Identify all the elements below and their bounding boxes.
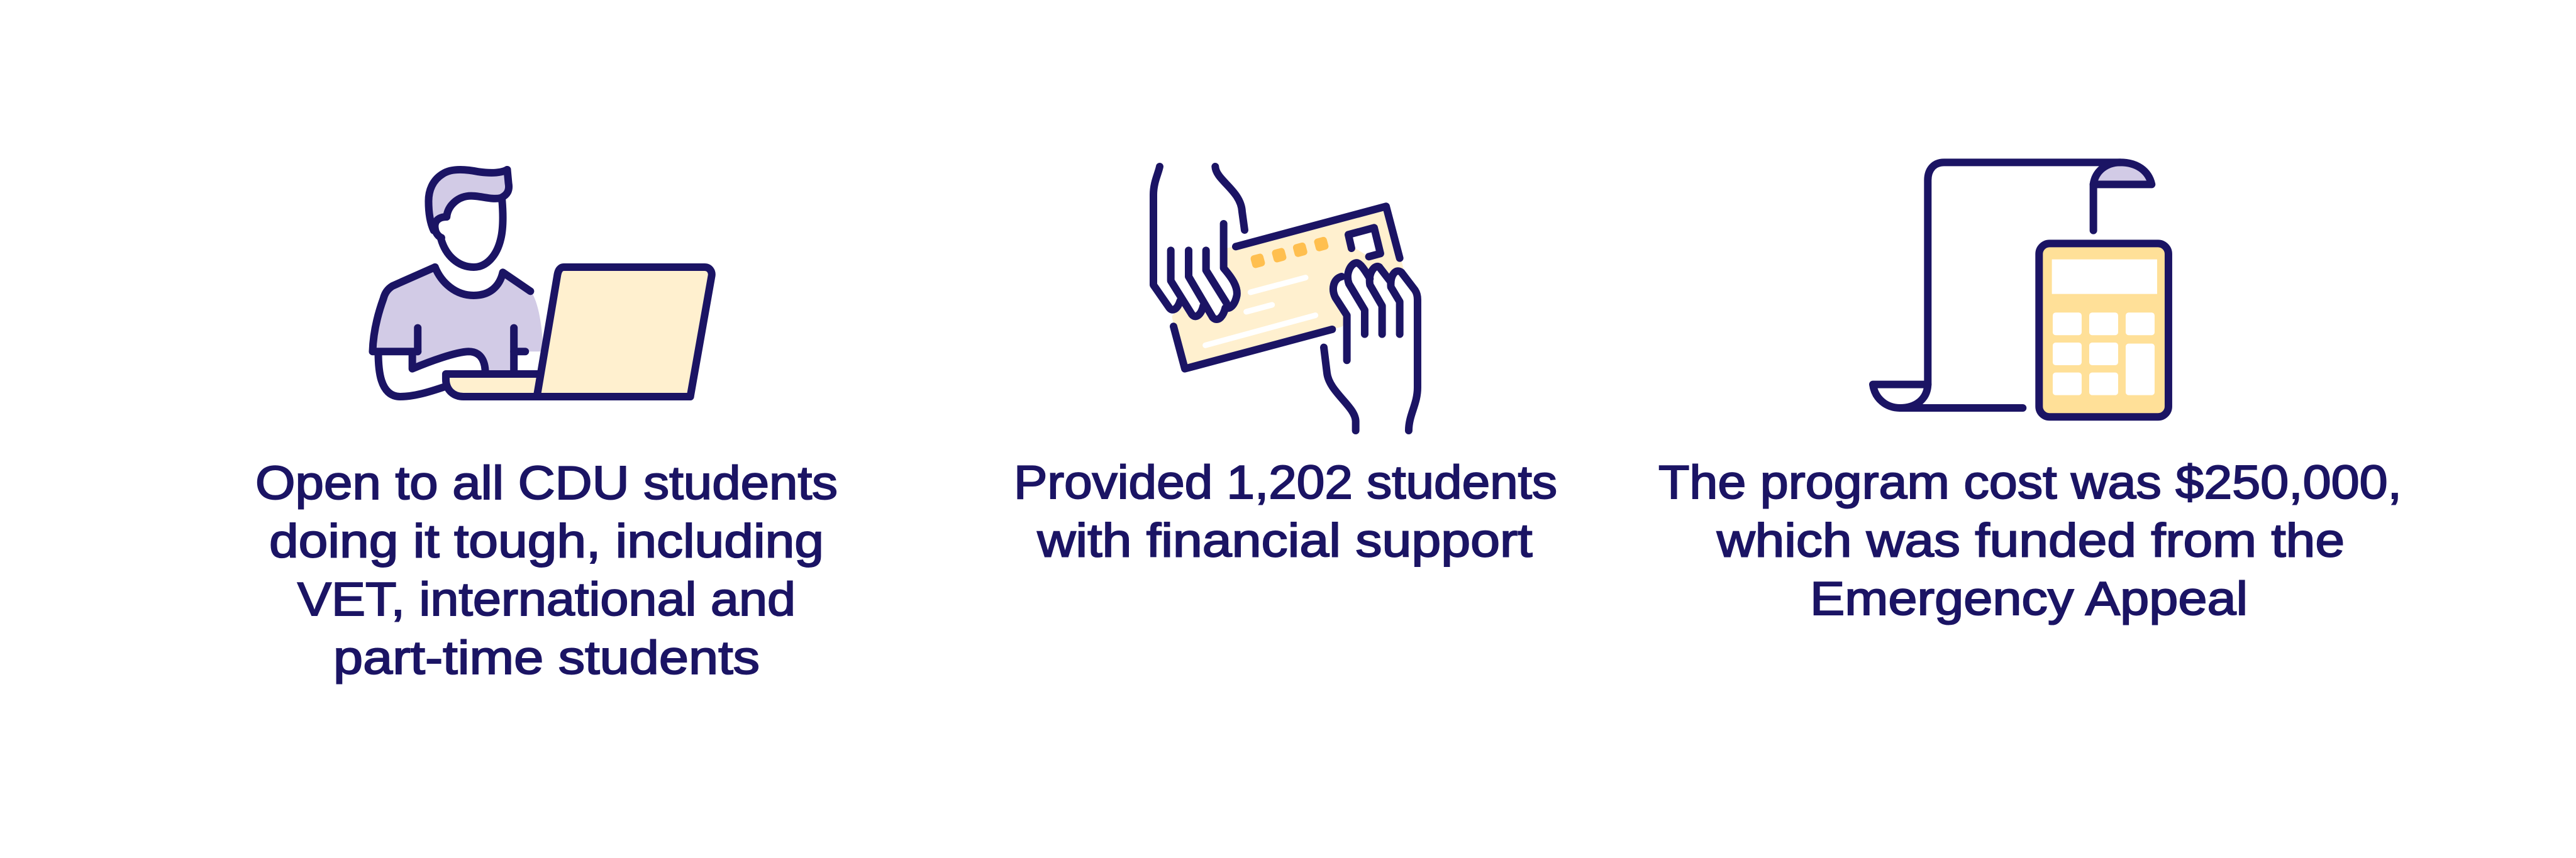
text: open to all students: doing it tough, including <box>269 514 824 567</box>
text: financial support: with financial support <box>1036 514 1533 567</box>
text: program cost: which was funded from the <box>1716 514 2345 567</box>
panel: open to all students <box>255 170 838 684</box>
text: open to all students: VET, international and <box>297 573 796 625</box>
text: financial support <box>1014 456 1557 567</box>
text: program cost: Emergency Appeal <box>1810 572 2248 625</box>
text: open to all students <box>255 456 838 684</box>
panel: financial support <box>1014 167 1557 567</box>
text: open to all students: part-time students <box>333 631 760 684</box>
text: financial support: Provided 1,202 students <box>1014 456 1557 509</box>
icon: paper scroll and calculator <box>1873 162 2168 417</box>
text: open to all students: Open to all CDU students <box>255 456 838 509</box>
icon: hands exchanging card <box>1153 167 1418 431</box>
text: program cost <box>1658 456 2402 625</box>
panel: program cost <box>1658 162 2402 625</box>
text: program cost: The program cost was $250,000, <box>1658 456 2402 509</box>
icon: student at laptop <box>372 170 712 397</box>
